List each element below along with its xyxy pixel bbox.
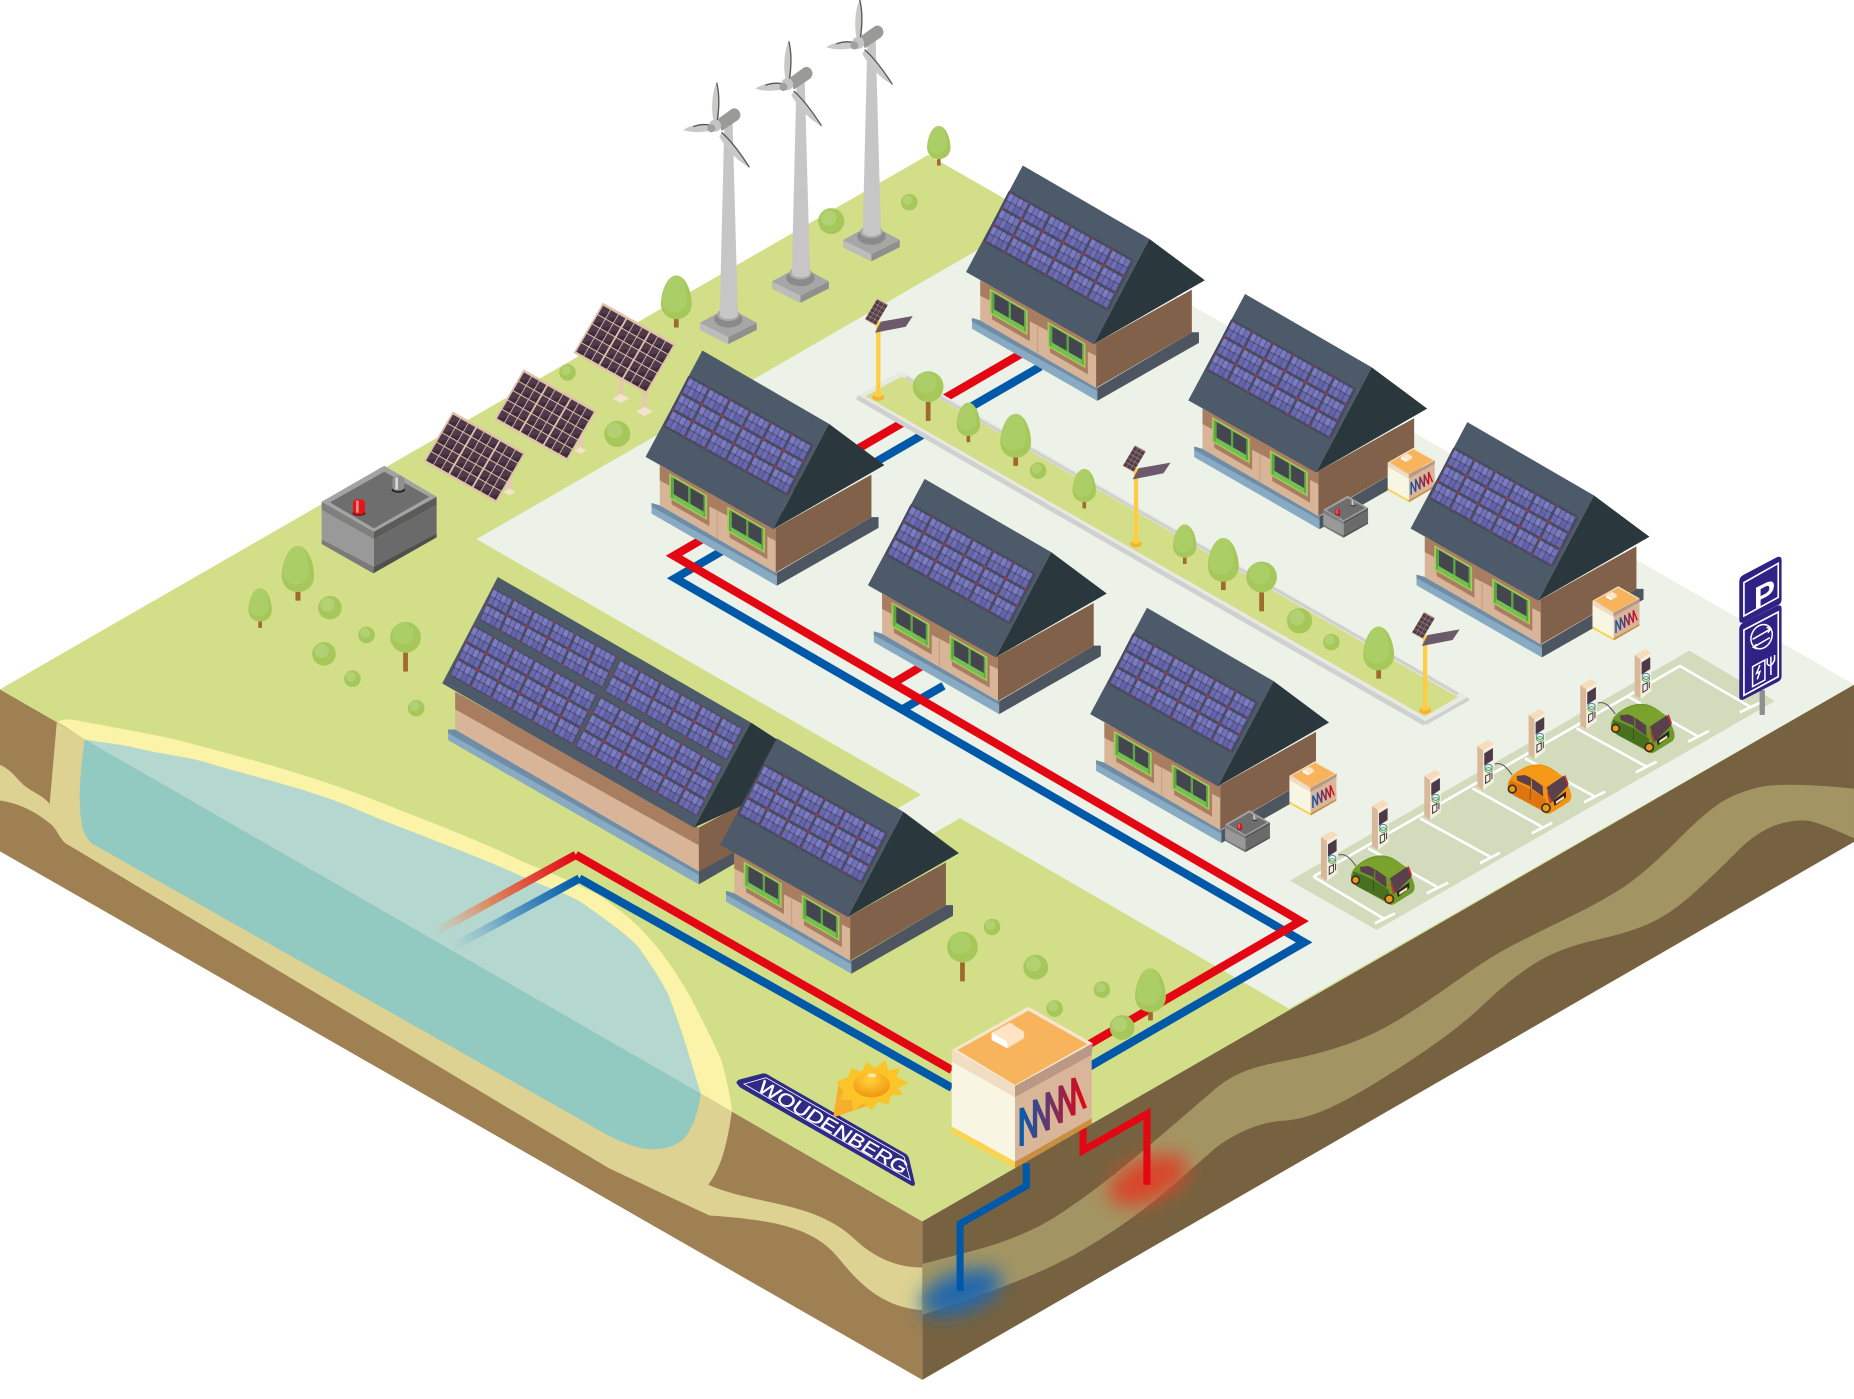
parking sign <box>1739 557 1782 715</box>
trees and bushes near the heat station <box>947 919 1166 1040</box>
turbine 3 <box>826 0 900 261</box>
pipes: blue heat network <box>450 367 1304 1088</box>
green car rear <box>1611 704 1675 753</box>
parking lines <box>1313 666 1760 923</box>
roof solar array B <box>449 625 597 745</box>
pipes: red heat network <box>432 354 1301 1070</box>
EV parking area <box>1290 557 1782 930</box>
panel 1 <box>423 411 526 503</box>
letter P: P <box>1754 573 1775 618</box>
roof solar array A <box>479 588 617 688</box>
house 2 <box>1188 294 1427 529</box>
long building <box>442 577 822 884</box>
wind turbines <box>683 0 900 344</box>
street lamp 2 <box>1122 445 1171 547</box>
street lamp 3 <box>1412 612 1460 714</box>
street lamp 1 <box>865 298 913 401</box>
solar logo and Woudenberg nameplate <box>737 1060 915 1186</box>
large battery <box>322 466 437 573</box>
sun logo <box>833 1060 908 1117</box>
lake surface <box>85 739 701 1093</box>
nameplate inner outline <box>744 1078 910 1180</box>
trees and bushes on the back strip <box>559 126 951 447</box>
house 4 <box>646 350 884 586</box>
ground solar farm <box>423 303 676 503</box>
nameplate <box>737 1073 915 1186</box>
turbine 1 <box>683 83 757 344</box>
pipe: red underground <box>1083 1114 1147 1185</box>
turbine 2 <box>755 41 829 303</box>
soil layer: sand left face <box>0 722 922 1310</box>
house 1 <box>966 166 1205 401</box>
green car front <box>1351 855 1415 905</box>
orange car <box>1508 764 1571 814</box>
house 5 <box>868 479 1107 714</box>
roof solar array C <box>604 659 743 761</box>
nameplate text: WOUDENBERG <box>753 1078 912 1179</box>
ground block: soil left face <box>0 689 922 1380</box>
charging posts <box>1321 649 1651 881</box>
heat unit at house 6 <box>1289 761 1337 816</box>
soil layer: aquifer right face <box>922 785 1854 1315</box>
underground hot store glow <box>1101 1143 1196 1217</box>
beach <box>57 719 732 1111</box>
heat unit at house 2 <box>1388 448 1435 502</box>
charging icons <box>1747 621 1776 687</box>
panel legs <box>504 376 653 495</box>
house 6 <box>1090 608 1329 843</box>
median strip with trees <box>857 371 1469 724</box>
underground cold store glow <box>914 1259 1008 1326</box>
charging cables <box>1339 703 1615 866</box>
trees and bushes on the left lawn <box>248 546 424 717</box>
central heat station <box>952 1007 1093 1168</box>
road and paved area <box>477 216 1854 1009</box>
heat unit at house 3 <box>1592 586 1640 641</box>
ground surface: grass <box>0 155 1854 1221</box>
lake cross-section <box>80 739 701 1149</box>
ground block: soil right face <box>922 685 1854 1380</box>
panel 3 <box>573 303 676 394</box>
roof solar array D <box>575 696 723 817</box>
small battery at house 2 <box>1323 496 1368 538</box>
house 3 <box>1411 422 1649 657</box>
parking pad <box>1290 651 1775 930</box>
panel 2 <box>494 369 597 461</box>
house 7 <box>720 738 959 974</box>
pipe: blue underground <box>960 1163 1026 1291</box>
small battery at house 6 <box>1225 810 1270 852</box>
